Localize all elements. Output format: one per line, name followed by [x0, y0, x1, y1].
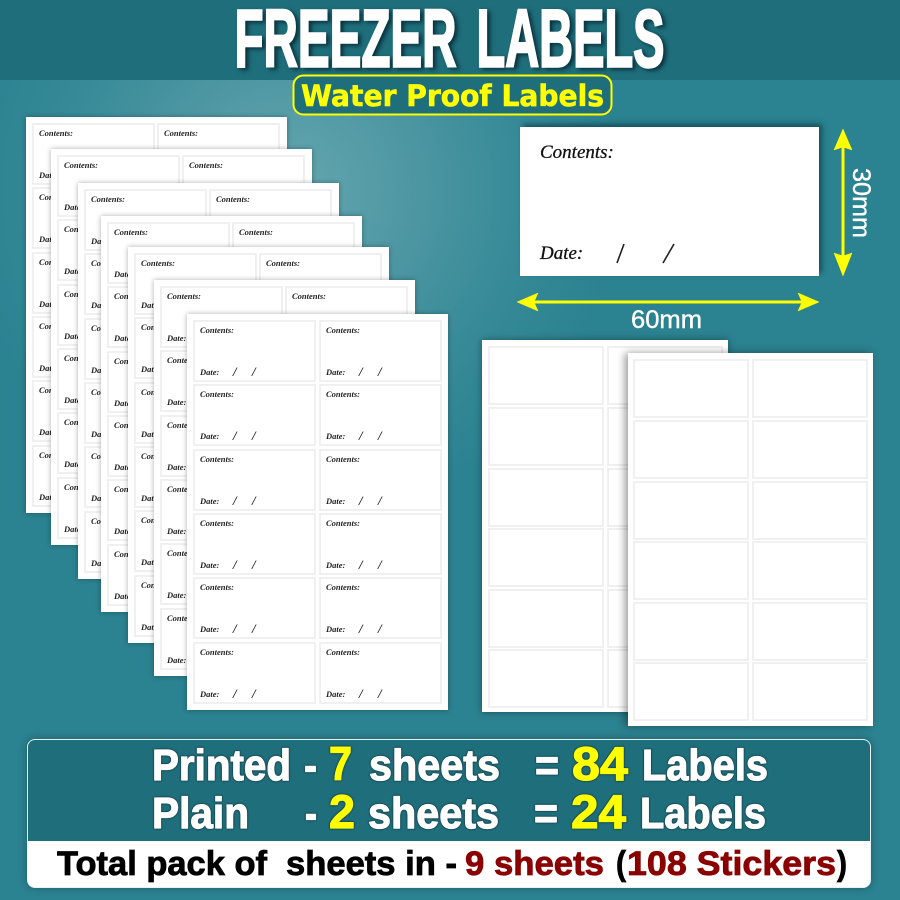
printed sheet 3: Contents: [91, 258, 125, 268]
printed sheet 7 (front): Date: [200, 689, 219, 699]
printed sheet 6: Contents: [292, 291, 326, 301]
row: printed sheets: Labels [642, 741, 768, 790]
printed sheet 2: Contents: [64, 224, 98, 234]
row: printed sheets: sheets [369, 741, 500, 790]
printed sheet 1: Contents: [39, 385, 73, 395]
printed sheet 7 (front): Date: [200, 624, 219, 634]
printed sheet 2: Date: [64, 395, 83, 405]
printed sheet 7 (front): / [233, 686, 237, 701]
printed sheet 2: Date: [64, 459, 83, 469]
printed sheet 4: Contents: [114, 356, 148, 366]
plain sheet 2 [628, 353, 873, 726]
printed sheet 7 (front): / [359, 364, 363, 379]
printed sheet 7 (front): Contents: [326, 647, 360, 657]
printed sheet 4: Contents: [114, 291, 148, 301]
printed sheet 1: Contents: [39, 321, 73, 331]
printed sheet 6: Contents: [167, 420, 201, 430]
printed sheet 5: Date: [141, 429, 160, 439]
printed sheet 3: Date: [91, 558, 110, 568]
printed sheet 7 (front): / [359, 686, 363, 701]
printed sheet 1: Date: [39, 234, 58, 244]
printed sheet 5: Date: [141, 557, 160, 567]
printed sheet 7 (front): / [378, 428, 382, 443]
printed sheet 5: Date: [141, 300, 160, 310]
printed sheet 5: Date: [141, 622, 160, 632]
printed sheet 2 [51, 149, 312, 545]
printed sheet 2: Date: [64, 524, 83, 534]
printed sheet 3: Contents: [91, 194, 125, 204]
printed sheet 7 (front): / [359, 428, 363, 443]
printed sheet 7 (front): Contents: [200, 582, 234, 592]
printed sheet 5: Contents: [141, 387, 175, 397]
printed sheet 7 (front): Date: [326, 431, 345, 441]
printed sheet 4 [101, 216, 362, 612]
printed sheet 7 (front): Date: [326, 496, 345, 506]
printed sheet 7 (front): Contents: [200, 647, 234, 657]
printed sheet 7 (front): Date: [326, 560, 345, 570]
printed sheet 7 (front): / [252, 686, 256, 701]
printed sheet 7 (front): Contents: [200, 518, 234, 528]
printed sheet 1: Date: [39, 363, 58, 373]
printed sheet 6: Date: [167, 397, 186, 407]
printed sheet 7 (front): Contents: [200, 389, 234, 399]
printed sheet 1: Date: [39, 170, 58, 180]
printed sheet 1: Contents: [164, 128, 198, 138]
printed sheet 4: Contents: [114, 227, 148, 237]
printed sheet 1 [26, 117, 287, 513]
printed sheet 7 (front): Date: [326, 367, 345, 377]
printed sheet 1: Date: [39, 492, 58, 502]
printed sheet 2: Contents: [64, 417, 98, 427]
row: total [57, 845, 847, 883]
printed sheet 6 [154, 280, 415, 676]
row: printed sheets: 7 [329, 737, 352, 790]
printed sheet 4: Date: [114, 269, 133, 279]
printed sheet 7 (front): / [252, 364, 256, 379]
printed sheet 7 (front): / [233, 621, 237, 636]
printed sheet 3: Contents: [91, 451, 125, 461]
row: printed sheets: Printed [152, 741, 291, 790]
row: plain sheets: 24 [571, 785, 626, 838]
printed sheet 1: Date: [39, 299, 58, 309]
printed sheet 1: Date: [39, 427, 58, 437]
printed sheet 7 (front): / [233, 428, 237, 443]
plain sheet 1 [482, 340, 728, 712]
printed sheet 7 (front): / [378, 686, 382, 701]
row: total: ) [837, 845, 847, 883]
printed sheet 2: Contents: [64, 160, 98, 170]
printed sheet 5: Contents: [141, 451, 175, 461]
printed sheet 3: Date: [91, 429, 110, 439]
printed sheet 6: Date: [167, 462, 186, 472]
printed sheet 6: Contents: [167, 291, 201, 301]
printed sheet 7 (front): Date: [326, 624, 345, 634]
printed sheet 1: Contents: [39, 128, 73, 138]
summary panel [27, 739, 871, 888]
printed sheet 7 (front): Contents: [200, 454, 234, 464]
row: plain sheets [152, 785, 766, 838]
printed sheet 7 (front): / [359, 557, 363, 572]
printed sheet 5: Contents: [141, 258, 175, 268]
printed sheet 7 (front): / [252, 621, 256, 636]
row: plain sheets: 2 [329, 785, 355, 838]
printed sheet 6: Contents: [167, 613, 201, 623]
printed sheet 4: Contents: [239, 227, 273, 237]
printed sheet 7 (front): / [378, 621, 382, 636]
row: plain sheets: = [534, 789, 558, 838]
printed sheet 7 (front): / [233, 364, 237, 379]
printed sheet 7 (front): / [378, 557, 382, 572]
printed sheet 4: Date: [114, 526, 133, 536]
printed sheet 7 (front): / [252, 493, 256, 508]
printed sheet 1: Contents: [39, 192, 73, 202]
badge: water proof labels: Water Proof Labels [301, 79, 604, 113]
printed sheet 6: Date: [167, 655, 186, 665]
printed sheet 5: Date: [141, 493, 160, 503]
printed sheet 6: Contents: [167, 355, 201, 365]
printed sheet 3: Date: [91, 300, 110, 310]
row: total: sheets in - [286, 845, 457, 883]
header band [0, 0, 900, 80]
dimension label: 30mm: 30mm [847, 168, 875, 238]
row: total: 9 sheets [465, 845, 604, 883]
row: plain sheets: sheets [368, 789, 499, 838]
printed sheet 4: Date: [114, 462, 133, 472]
printed sheet 7 (front): / [252, 428, 256, 443]
printed sheet 3 [78, 183, 339, 579]
printed sheet 6: Date: [167, 526, 186, 536]
printed sheet 7 (front): Date: [326, 689, 345, 699]
printed sheet 7 (front): Contents: [326, 518, 360, 528]
printed sheet 7 (front): / [252, 557, 256, 572]
printed sheet 5: Contents: [141, 322, 175, 332]
row: printed sheets [152, 737, 768, 790]
printed sheet 3: Contents: [91, 516, 125, 526]
printed sheet 7 (front): Contents: [326, 325, 360, 335]
row: plain sheets: - [305, 789, 317, 838]
row: total: Total pack of [57, 845, 268, 883]
printed sheet 4: Contents: [114, 484, 148, 494]
printed sheet 5: Contents: [141, 580, 175, 590]
row: total: ( [616, 845, 627, 883]
row: total: 108 Stickers [627, 845, 836, 883]
printed sheet 7 (front): Contents: [326, 454, 360, 464]
printed sheet 4: Contents: [114, 549, 148, 559]
printed sheet 5: Contents: [266, 258, 300, 268]
printed sheet 1: Contents: [39, 257, 73, 267]
printed sheet 5 [128, 247, 389, 643]
printed sheet 6: Date: [167, 333, 186, 343]
printed sheet 1: Contents: [39, 450, 73, 460]
printed sheet 7 (front): / [378, 364, 382, 379]
printed sheet 3: Contents: [216, 194, 250, 204]
printed sheet 5: Contents: [141, 515, 175, 525]
printed sheet 2: Contents: [189, 160, 223, 170]
printed sheet 2: Contents: [64, 482, 98, 492]
printed sheet 7 (front): Contents: [200, 325, 234, 335]
printed sheet 3: Date: [91, 236, 110, 246]
printed sheet 2: Date: [64, 266, 83, 276]
large sample label: Date: [540, 243, 583, 264]
printed sheet 6: Contents: [167, 484, 201, 494]
printed sheet 3: Date: [91, 365, 110, 375]
printed sheet 4: Contents: [114, 420, 148, 430]
printed sheet 4: Date: [114, 591, 133, 601]
printed sheet 2: Contents: [64, 289, 98, 299]
printed sheet 7 (front) [187, 314, 448, 710]
printed sheet 3: Contents: [91, 323, 125, 333]
printed sheet 2: Date: [64, 202, 83, 212]
large sample label [520, 127, 819, 276]
row: printed sheets: 84 [572, 737, 628, 790]
printed sheet 7 (front): Date: [200, 496, 219, 506]
printed sheet 5: Date: [141, 364, 160, 374]
row: plain sheets: Plain [152, 789, 249, 838]
dimension label: 60mm: 60mm [631, 306, 702, 334]
large sample label: Contents: [540, 142, 614, 163]
printed sheet 7 (front): Date: [200, 367, 219, 377]
printed sheet 2: Date: [64, 331, 83, 341]
printed sheet 6: Contents: [167, 548, 201, 558]
printed sheet 7 (front): Date: [200, 431, 219, 441]
printed sheet 6: Date: [167, 590, 186, 600]
row: plain sheets: Labels [640, 789, 766, 838]
printed sheet 4: Date: [114, 333, 133, 343]
printed sheet 7 (front): / [359, 621, 363, 636]
printed sheet 7 (front): Date: [200, 560, 219, 570]
printed sheet 3: Date: [91, 493, 110, 503]
printed sheet 7 (front): Contents: [326, 582, 360, 592]
printed sheet 7 (front): Contents: [326, 389, 360, 399]
printed sheet 7 (front): / [378, 493, 382, 508]
printed sheet 4: Date: [114, 398, 133, 408]
printed sheet 7 (front): / [359, 493, 363, 508]
row: printed sheets: - [304, 741, 317, 790]
printed sheet 3: Contents: [91, 387, 125, 397]
printed sheet 7 (front): / [233, 557, 237, 572]
printed sheet 7 (front): / [233, 493, 237, 508]
row: printed sheets: = [535, 741, 559, 790]
printed sheet 2: Contents: [64, 353, 98, 363]
